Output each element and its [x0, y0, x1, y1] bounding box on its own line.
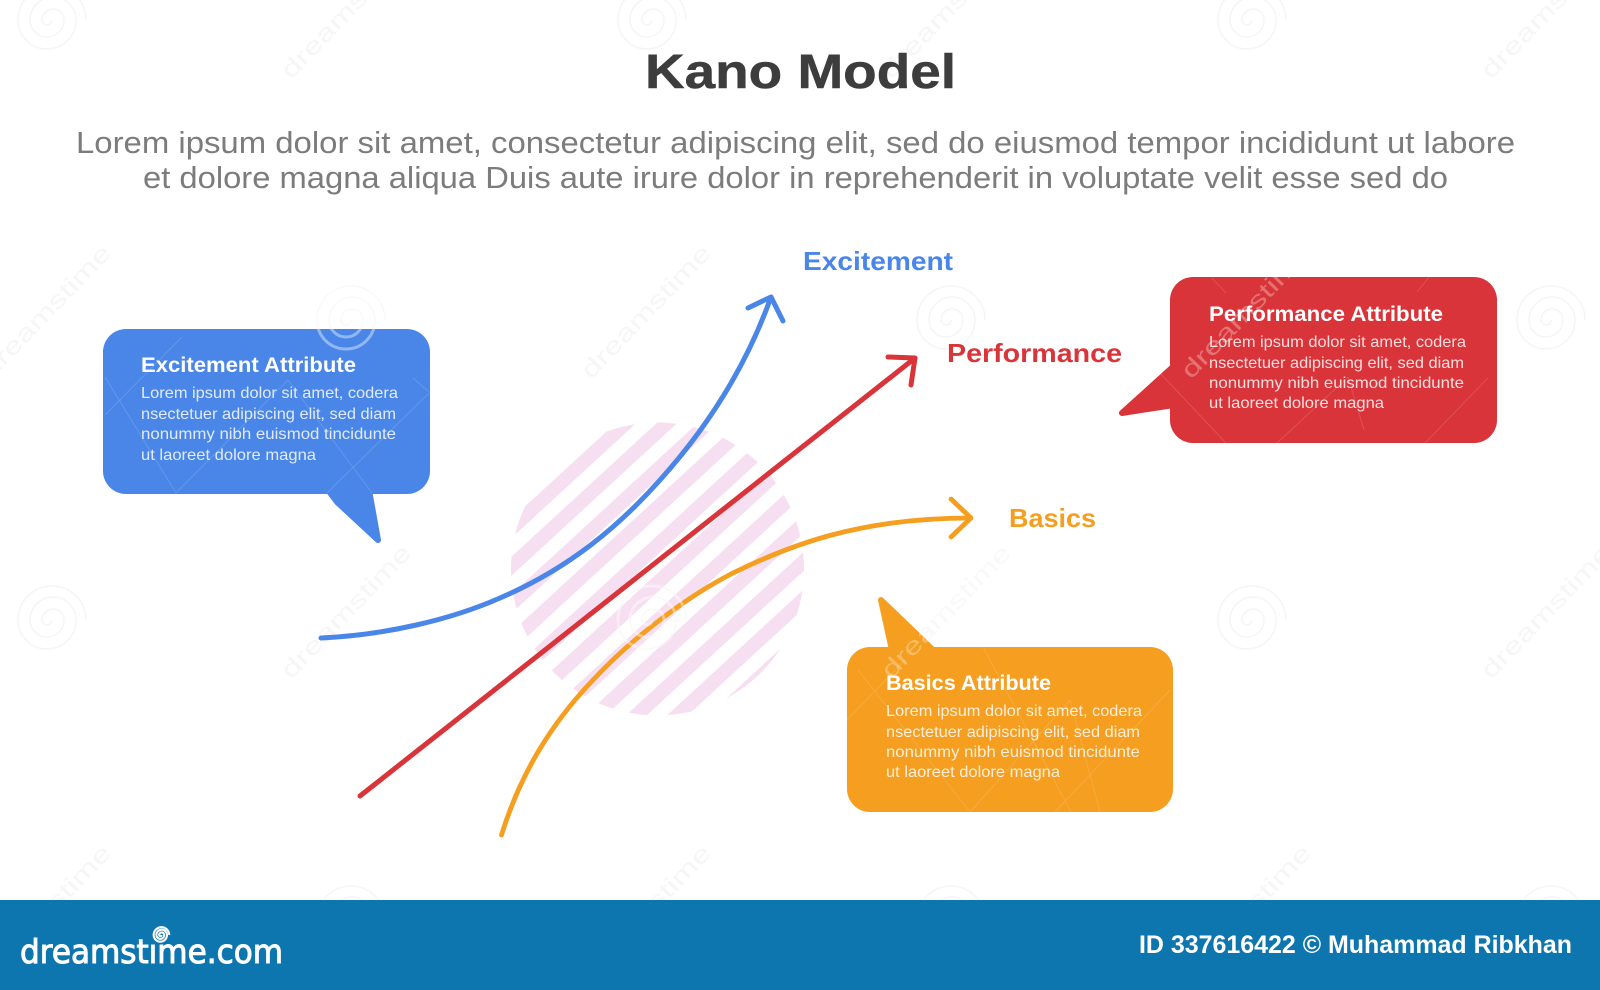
arrow: excitement curve — [321, 297, 783, 638]
striped pink circle — [511, 422, 804, 715]
arrow: performance line — [360, 357, 915, 796]
label: Excitement: Excitement — [803, 246, 953, 276]
title: Kano Model — [645, 46, 956, 99]
subtitle text: Lorem ipsum dolor sit amet, consectetur adipiscing elit, sed do eiusmod tempor incididunt ut labore — [76, 125, 1515, 160]
panel: performance attribute callout: nonummy nibh euismod tincidunte — [1209, 375, 1464, 392]
footer logo: dreamstıme.com — [20, 932, 283, 971]
panel: performance attribute callout: Lorem ipsum dolor sit amet, codera — [1209, 334, 1466, 351]
panel: basics attribute callout: Basics Attribute — [886, 672, 1051, 695]
panel: performance attribute callout — [1122, 277, 1497, 443]
panel: basics attribute callout: nsectetuer adipiscing elit, sed diam — [886, 724, 1140, 741]
footer credit: ID 337616422 © Muhammad Ribkhan — [1139, 931, 1572, 959]
watermark: faint spirals and dreamstime text: dreamstime — [876, 540, 1017, 684]
watermark: faint spirals and dreamstime text: dreamstime — [1476, 540, 1600, 684]
panel: excitement attribute callout: Excitement Attribute — [141, 354, 356, 377]
watermark overlay on coloured shapes: dreamstime — [1176, 240, 1317, 384]
label: Basics: Basics — [1009, 503, 1096, 533]
watermark overlay on coloured shapes: dreamstime — [876, 540, 1017, 684]
watermark: faint spirals and dreamstime text: dreamstime — [576, 840, 717, 984]
panel: performance attribute callout: ut laoreet dolore magna — [1209, 395, 1384, 412]
panel: excitement attribute callout: nonummy nibh euismod tincidunte — [141, 426, 396, 443]
watermark: faint spirals and dreamstime text: dreamstime — [576, 240, 717, 384]
watermark: faint spirals and dreamstime text: dreamstime — [1176, 840, 1317, 984]
panel: excitement attribute callout: ut laoreet dolore magna — [141, 447, 316, 464]
label: Performance: Performance — [947, 338, 1122, 368]
panel: basics attribute callout: ut laoreet dolore magna — [886, 764, 1060, 781]
panel: excitement attribute callout: nsectetuer adipiscing elit, sed diam — [141, 406, 396, 423]
arrow: basics curve — [502, 499, 971, 835]
panel: performance attribute callout: nsectetuer adipiscing elit, sed diam — [1209, 355, 1464, 372]
panel: performance attribute callout: Performance Attribute — [1209, 303, 1443, 326]
panel: basics attribute callout: Lorem ipsum dolor sit amet, codera — [886, 703, 1142, 720]
panel: basics attribute callout — [847, 600, 1173, 812]
panel: excitement attribute callout — [103, 329, 430, 540]
footer bar — [0, 900, 1600, 990]
subtitle text — [76, 125, 1515, 195]
subtitle text: et dolore magna aliqua Duis aute irure dolor in reprehenderit in voluptate velit esse sed do — [143, 160, 1448, 195]
panel: excitement attribute callout: Lorem ipsum dolor sit amet, codera — [141, 385, 398, 402]
watermark: faint spirals and dreamstime text: dreamstime — [276, 540, 417, 684]
panel: basics attribute callout: nonummy nibh euismod tincidunte — [886, 744, 1140, 761]
watermark overlay on coloured shapes — [317, 240, 1317, 684]
